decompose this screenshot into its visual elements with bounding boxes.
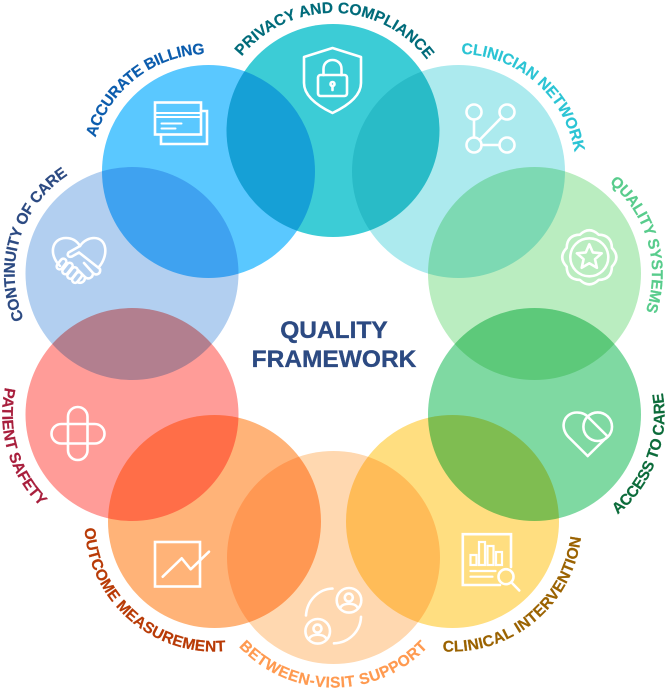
label: clinician network: CLINICIAN NETWORK (462, 43, 586, 152)
title: FRAMEWORK (252, 346, 417, 373)
circle: outcome measurement (108, 415, 321, 628)
label: continuity of care: CONTINUITY OF CARE (4, 166, 68, 322)
label: clinical intervention: CLINICAL INTERVENTION (443, 536, 581, 652)
icon: handshake heart (53, 238, 105, 284)
circle: between-visit support (227, 451, 440, 664)
circle: patient safety (26, 308, 238, 521)
label: accurate billing: ACCURATE BILLING (86, 44, 204, 138)
circle: accurate billing (102, 65, 315, 278)
icon: report with magnifier (463, 534, 519, 590)
icon: billing cards (155, 102, 207, 144)
title: QUALITY (280, 317, 388, 344)
circle: privacy and compliance (226, 24, 440, 237)
label: outcome measurement: OUTCOME MEASUREMENT (84, 528, 226, 652)
circle: clinician network (352, 65, 565, 278)
icon: network nodes (466, 104, 514, 152)
title (252, 317, 417, 373)
circle: quality systems (428, 167, 641, 380)
label: privacy and compliance: PRIVACY AND COMPLIANCE (234, 2, 435, 60)
icon: chart in frame (155, 542, 209, 586)
icon: shield with lock (304, 48, 361, 113)
circle: continuity of care (26, 167, 238, 380)
label: quality systems: QUALITY SYSTEMS (612, 177, 663, 313)
icon: two people cycle (305, 588, 361, 644)
icon: cross outline (52, 407, 104, 460)
icon: quality badge with star (562, 230, 616, 284)
circle: access to care (428, 308, 641, 521)
circle: clinical intervention (346, 415, 559, 628)
icon: heart with pill (564, 412, 612, 456)
